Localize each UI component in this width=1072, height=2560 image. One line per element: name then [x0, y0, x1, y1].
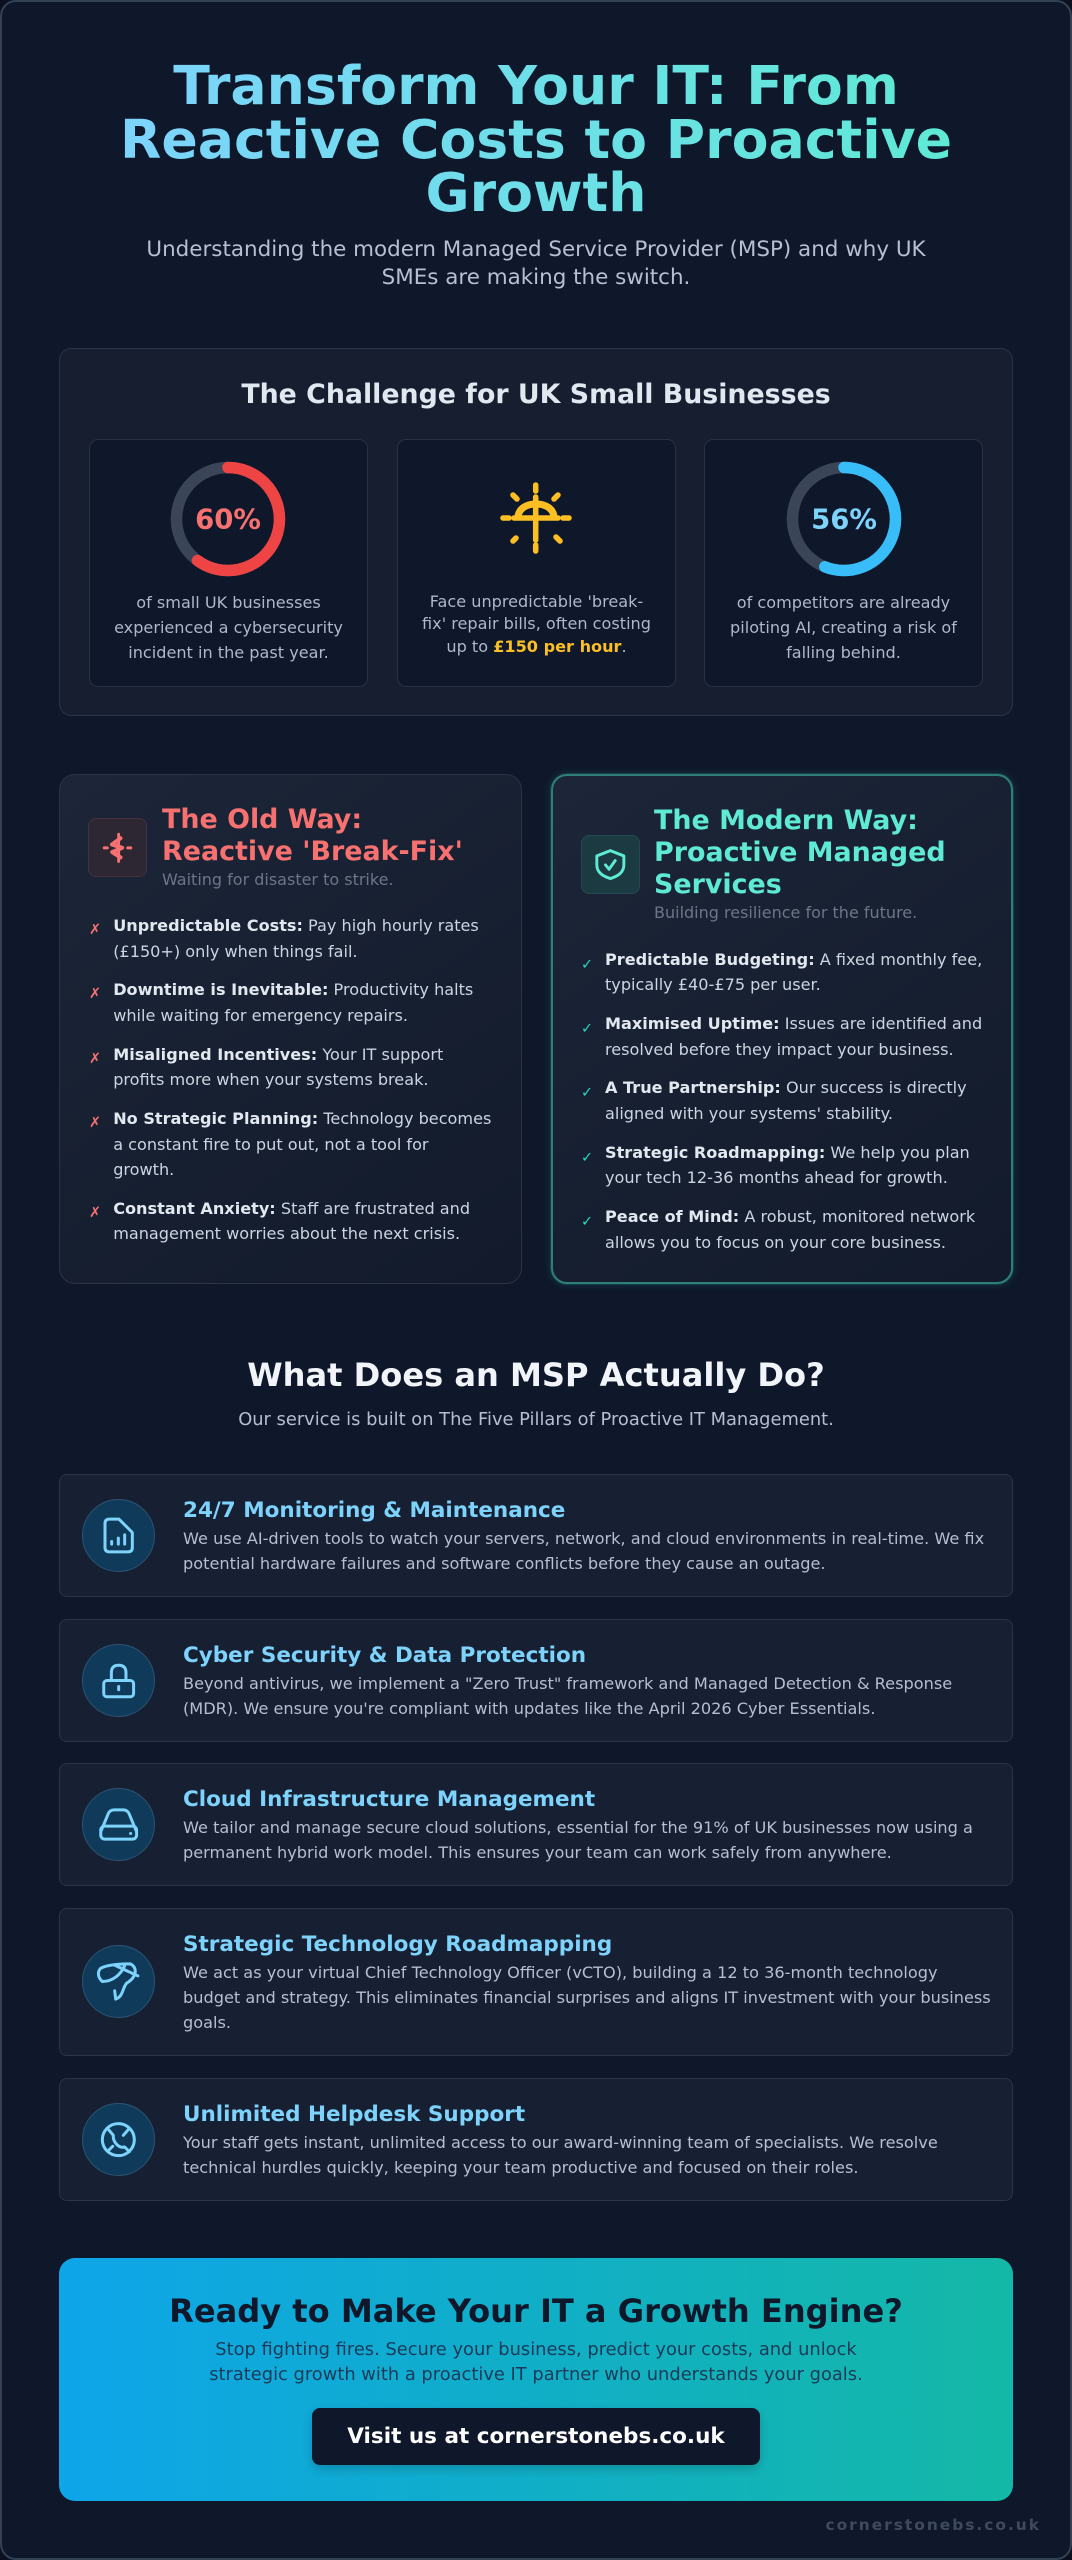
item [89, 980, 473, 1025]
item: Constant Anxiety: Staff are frustrated and [113, 1199, 470, 1218]
stat text: incident in the past year. [128, 643, 329, 662]
item [581, 1014, 982, 1059]
list: old way issues: ✗ [89, 1051, 101, 1067]
heading: the old way: The Old Way: [162, 804, 362, 835]
list: modern way benefits [581, 950, 982, 1252]
sub-heading: Building resilience for the future. [654, 903, 917, 922]
footer brand: cornerstonebs.co.uk [825, 2516, 1041, 2534]
icon: warning [500, 482, 572, 554]
subtitle: SMEs are making the switch. [382, 265, 690, 290]
item: a constant fire to put out, not a tool for [113, 1135, 429, 1154]
heading: the modern way: Services [654, 869, 782, 900]
list: modern way benefits: ✓ [581, 1214, 593, 1230]
pillar title: Strategic Technology Roadmapping [183, 1932, 612, 1957]
pillar title: Cloud Infrastructure Management [183, 1787, 595, 1812]
heading: the modern way: The Modern Way: [654, 804, 918, 836]
item [581, 950, 982, 994]
item [89, 916, 479, 961]
stat text [422, 592, 651, 656]
list: modern way benefits: ✓ [581, 1150, 593, 1166]
pillar text: goals. [183, 2013, 231, 2032]
list: modern way benefits: ✓ [581, 1085, 593, 1101]
list: old way issues: ✗ [89, 1115, 101, 1131]
item: A True Partnership: Our success is directly [605, 1078, 967, 1097]
subtitle: Understanding the modern Managed Service Provider (MSP) and why UK [146, 236, 926, 262]
item: while waiting for emergency repairs. [113, 1006, 408, 1025]
item: your tech 12-36 months ahead for growth. [605, 1168, 948, 1187]
stat text: of competitors are already [737, 593, 950, 612]
donut chart: 60%: 60% [195, 504, 261, 536]
heading: the old way: Reactive 'Break-Fix' [162, 836, 463, 867]
panel: monitoring [59, 1474, 1013, 1597]
CTA text: strategic growth with a proactive IT partner who understands your goals. [209, 2364, 863, 2385]
heading: the modern way [654, 804, 946, 900]
item [89, 1199, 470, 1243]
stat text: piloting AI, creating a risk of [730, 618, 957, 637]
item [581, 1207, 975, 1252]
item: management worries about the next crisis. [113, 1224, 460, 1243]
stat card: break-fix bills [397, 439, 676, 687]
list: old way issues: ✗ [89, 1205, 101, 1221]
icon: drive [82, 1788, 155, 1861]
pillar text [183, 1963, 991, 2032]
item: aligned with your systems' stability. [605, 1104, 893, 1123]
list: old way issues [89, 916, 491, 1243]
stat text: falling behind. [786, 643, 901, 662]
panel: helpdesk [59, 2078, 1013, 2201]
icon: lock [82, 1644, 155, 1717]
panel: the modern way [551, 774, 1013, 1284]
list: modern way benefits: ✓ [581, 1021, 593, 1037]
donut chart: 56% [786, 462, 902, 576]
CTA button: Visit us at cornerstonebs.co.uk [347, 2424, 725, 2449]
stat text: up to £150 per hour. [446, 636, 627, 656]
pillar text: technical hurdles quickly, keeping your team productive and focused on their roles. [183, 2158, 858, 2177]
subtitle [146, 236, 926, 290]
stat text [730, 593, 958, 662]
item [581, 1078, 967, 1123]
item: Strategic Roadmapping: We help you plan [605, 1143, 970, 1162]
stat card: 56% [704, 439, 983, 687]
title [111, 59, 961, 220]
icon: support [82, 2103, 155, 2176]
pillar text: (MDR). We ensure you're compliant with updates like the April 2026 Cyber Essentials. [183, 1699, 875, 1718]
donut chart: 56%: 56% [811, 504, 877, 536]
panel: the challenge [59, 348, 1013, 716]
title: Growth [426, 161, 646, 224]
item: growth. [113, 1160, 174, 1179]
pillar text [183, 1674, 952, 1718]
pillar text [183, 1529, 984, 1573]
item [581, 1143, 970, 1187]
pillar title: Unlimited Helpdesk Support [183, 2102, 525, 2127]
CTA heading: Ready to Make Your IT a Growth Engine? [169, 2292, 903, 2330]
list: old way issues: ✗ [89, 922, 101, 938]
sub-heading: Our service is built on The Five Pillars of Proactive IT Management. [238, 1408, 834, 1430]
item: Unpredictable Costs: Pay high hourly rates [113, 916, 479, 935]
heading: the modern way: Proactive Managed [654, 837, 946, 868]
icon: file chart [82, 1499, 155, 1572]
heading: the challenge: The Challenge for UK Small Businesses [241, 378, 831, 410]
pillar text: We act as your virtual Chief Technology Officer (vCTO), building a 12 to 36-month technology [183, 1963, 938, 1982]
item [89, 1109, 491, 1179]
stat text: Face unpredictable 'break- [430, 592, 643, 610]
pillar text: permanent hybrid work model. This ensures your team can work safely from anywhere. [183, 1843, 892, 1862]
item: Peace of Mind: A robust, monitored network [605, 1207, 975, 1226]
icon: break-fix [88, 818, 147, 877]
panel: cloud [59, 1763, 1013, 1886]
item: resolved before they impact your business. [605, 1040, 954, 1059]
CTA text [209, 2339, 863, 2385]
CTA text: Stop fighting fires. Secure your business, predict your costs, and unlock [215, 2339, 857, 2360]
icon: roadmap [82, 1945, 155, 2018]
item: Maximised Uptime: Issues are identified and [605, 1014, 982, 1033]
pillar text: potential hardware failures and software conflicts before they cause an outage. [183, 1554, 826, 1573]
pillar text: Beyond antivirus, we implement a "Zero Trust" framework and Managed Detection & Response [183, 1674, 952, 1693]
item: Predictable Budgeting: A fixed monthly fee, [605, 950, 982, 969]
sub-heading: Waiting for disaster to strike. [162, 870, 394, 889]
panel: roadmapping [59, 1908, 1013, 2056]
title: Reactive Costs to Proactive [120, 108, 952, 170]
stat text: experienced a cybersecurity [114, 618, 343, 637]
panel: the old way [59, 774, 522, 1284]
pillar text: Your staff gets instant, unlimited access to our award-winning team of specialists. We resolve [183, 2133, 938, 2152]
stat card: 60% [89, 439, 368, 687]
pillar title: 24/7 Monitoring & Maintenance [183, 1498, 565, 1523]
panel: call to action [59, 2258, 1013, 2501]
CTA button [312, 2408, 760, 2465]
heading: what does an MSP do: What Does an MSP Actually Do? [247, 1356, 825, 1394]
panel: cyber security [59, 1619, 1013, 1742]
pillar title: Cyber Security & Data Protection [183, 1643, 586, 1668]
title: Transform Your IT: From [173, 54, 899, 117]
item [89, 1045, 443, 1089]
donut chart: 60% [170, 462, 286, 576]
pillar text: We tailor and manage secure cloud solutions, essential for the 91% of UK businesses now using a [183, 1818, 973, 1837]
item: No Strategic Planning: Technology becomes [113, 1109, 491, 1128]
stat text: fix' repair bills, often costing [422, 614, 651, 633]
item: allows you to focus on your core business. [605, 1233, 946, 1252]
item: Misaligned Incentives: Your IT support [113, 1045, 443, 1064]
pillar text: budget and strategy. This eliminates financial surprises and aligns IT investment with your business [183, 1988, 991, 2007]
heading: the old way [162, 804, 463, 867]
stat text [114, 593, 343, 662]
item: (£150+) only when things fail. [113, 942, 358, 961]
list: modern way benefits: ✓ [581, 957, 593, 973]
item: profits more when your systems break. [113, 1070, 429, 1089]
pillar text [183, 1818, 973, 1862]
list: old way issues: ✗ [89, 986, 101, 1002]
pillar text [183, 2133, 938, 2177]
pillar text: We use AI-driven tools to watch your servers, network, and cloud environments in real-time. We fix [183, 1529, 984, 1548]
stat text: of small UK businesses [136, 593, 321, 612]
item: typically £40-£75 per user. [605, 975, 821, 994]
item: Downtime is Inevitable: Productivity halts [113, 980, 473, 999]
icon: shield [581, 835, 640, 894]
